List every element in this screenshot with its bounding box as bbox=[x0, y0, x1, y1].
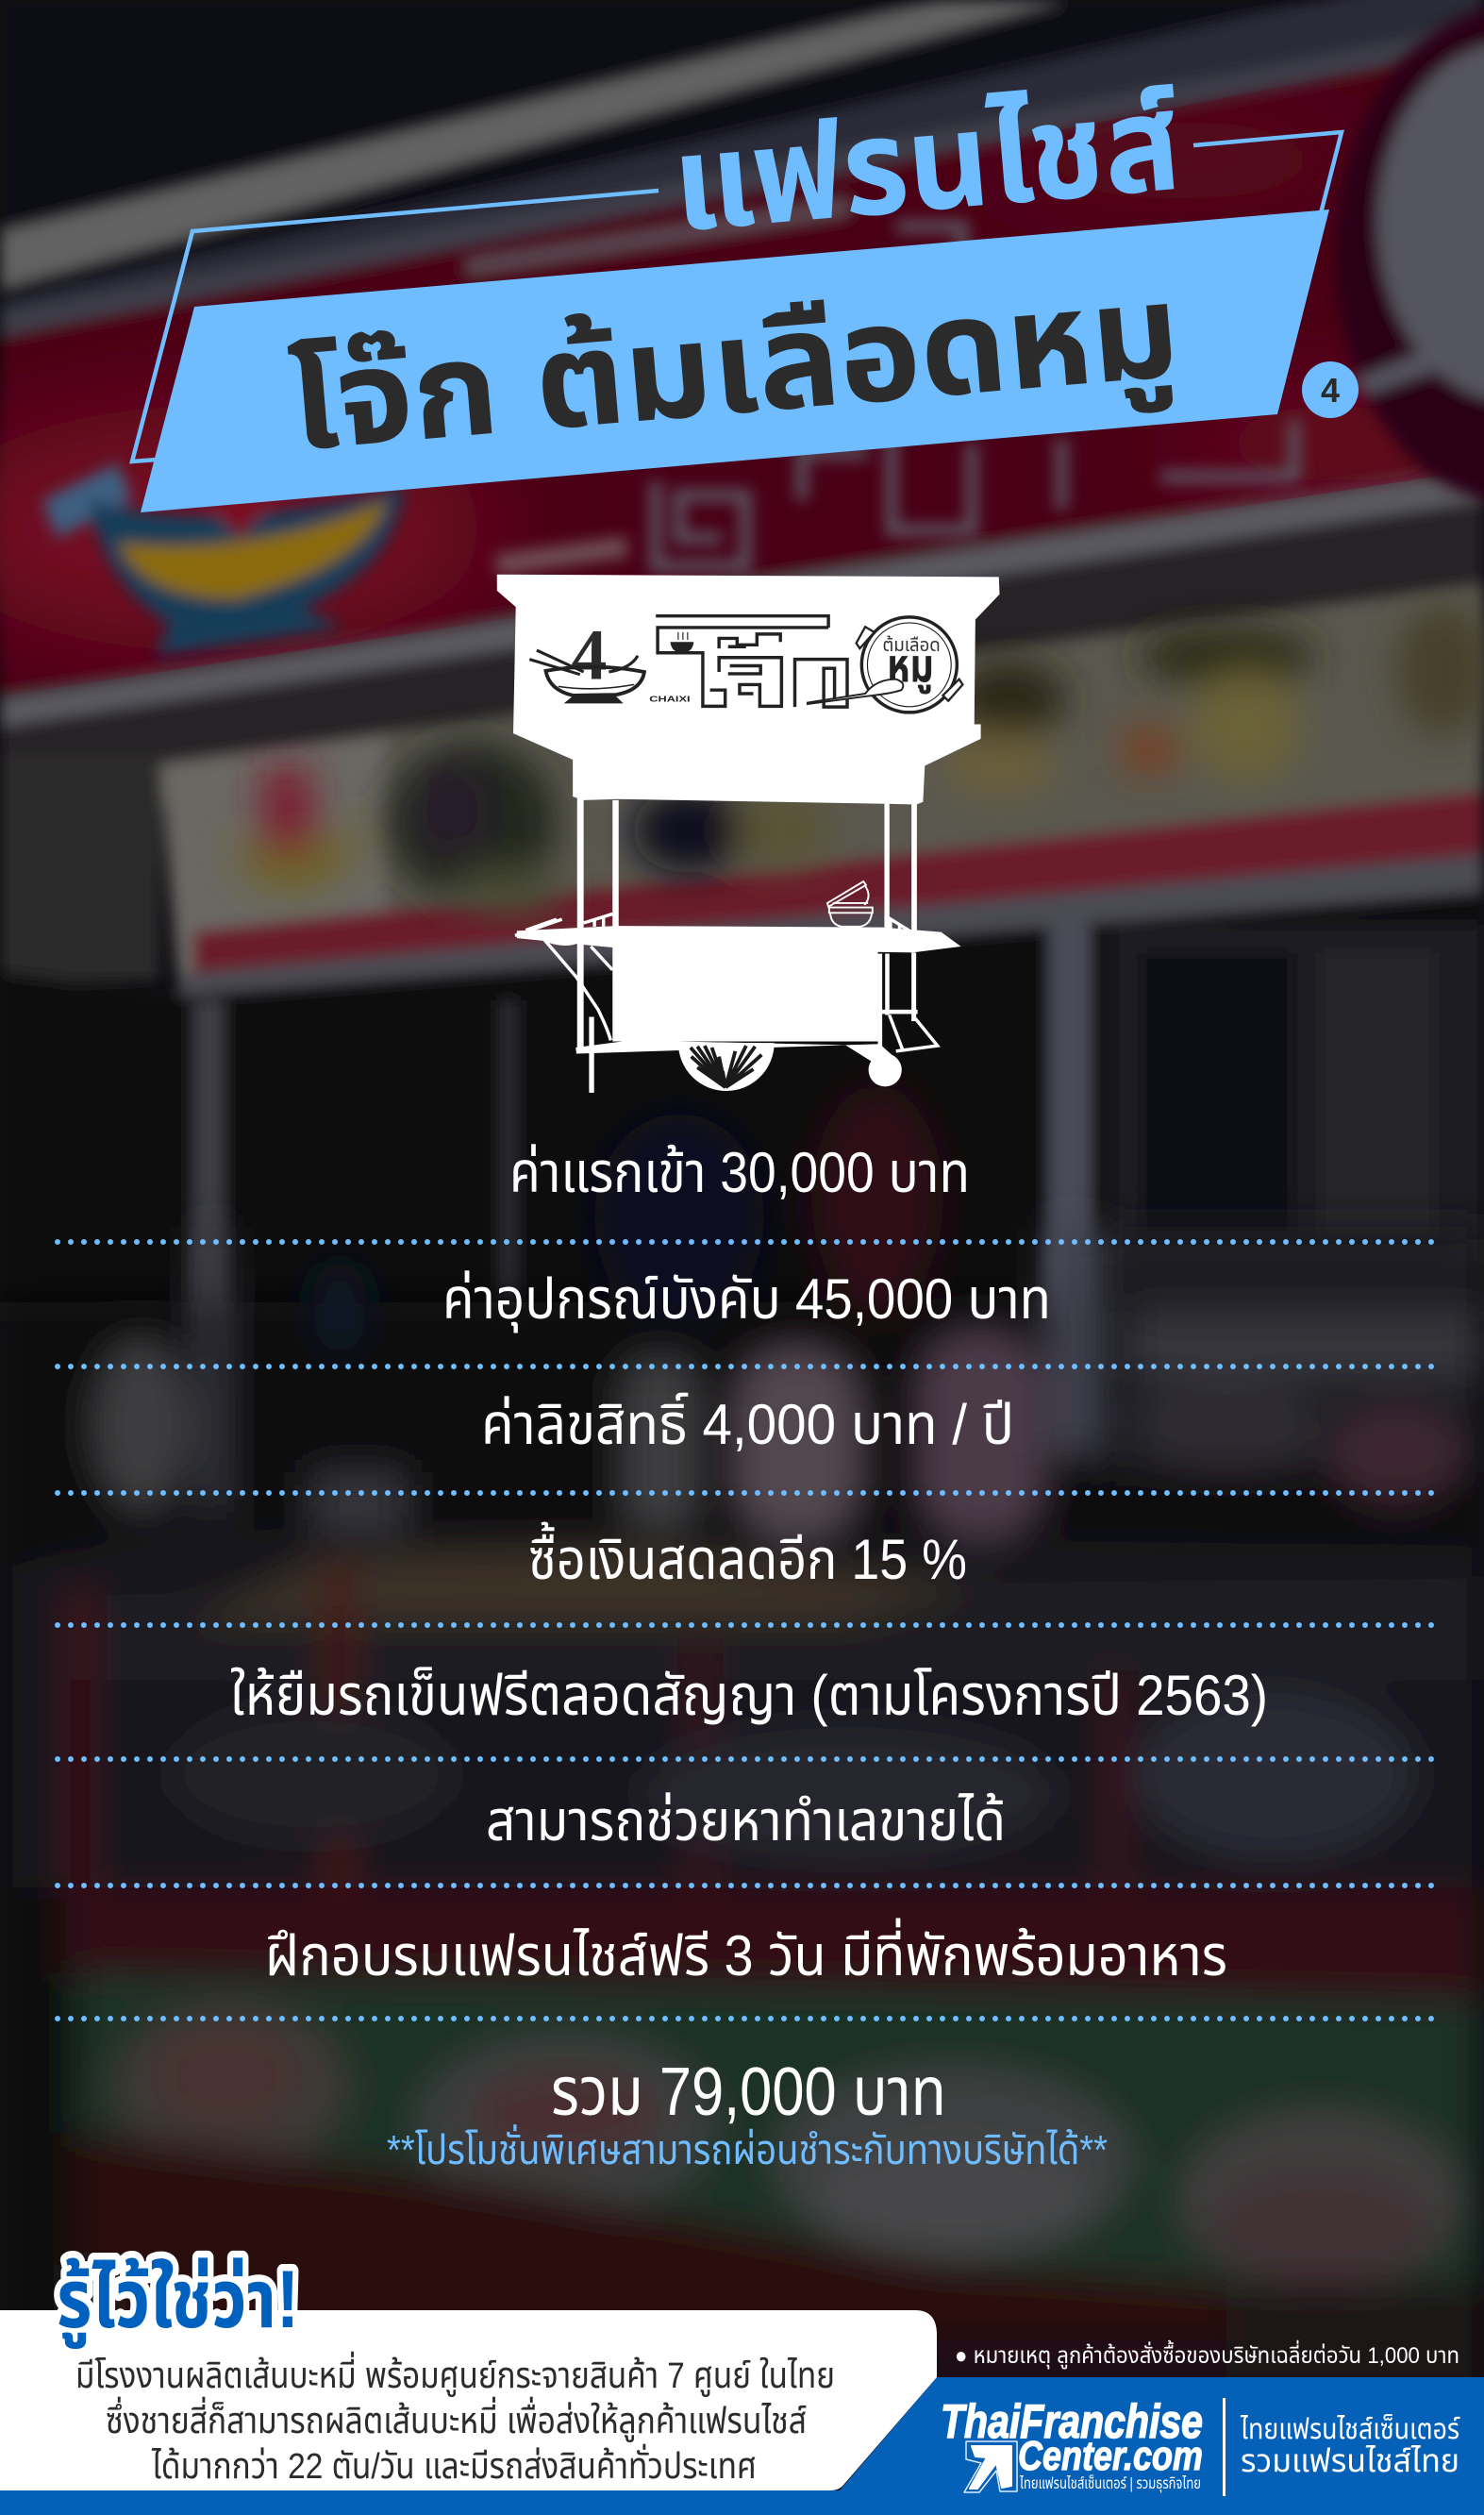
info row: equipment: ค่าอุปกรณ์บังคับ 45,000 บาท bbox=[442, 1267, 1051, 1333]
logo: ThaiFranchise Center: ไทยแฟรนไชส์เซ็นเตอร์ | รวมธุรกิจไทย bbox=[1019, 2474, 1201, 2493]
food panel details bbox=[226, 604, 1484, 915]
footer blue band bbox=[0, 2377, 1484, 2515]
dotted divider 6 bbox=[58, 1883, 1432, 1888]
promotion note: **โปรโมชั่นพิเศษสามารถผ่อนชำระกับทางบริษัทได้** bbox=[387, 2124, 1108, 2173]
cart logo: pot with ต้มเลือดหมู bbox=[808, 617, 962, 713]
badge: number 4 bbox=[1302, 361, 1359, 418]
cart silhouette bbox=[497, 575, 1000, 1093]
title frame outline bbox=[132, 132, 1342, 461]
total price: รวม 79,000 บาท bbox=[551, 2054, 946, 2130]
info row: cash discount: ซื้อเงินสดลดอีก 15 % bbox=[528, 1521, 967, 1591]
logo: ThaiFranchise Center bbox=[941, 2395, 1203, 2493]
panel body text bbox=[75, 2351, 835, 2487]
cart logo: pot with ต้มเลือดหมู: หมู bbox=[887, 639, 934, 694]
lattice marks on sign bbox=[656, 226, 1294, 566]
info row: location help: สามารถช่วยหาทำเลขายได้ bbox=[486, 1789, 1006, 1853]
info row: entrance fee: ค่าแรกเข้า 30,000 บาท bbox=[509, 1141, 970, 1204]
logo: ThaiFranchise Center: Center.com bbox=[1018, 2433, 1203, 2479]
bowl logo on sign bbox=[42, 5, 1484, 656]
title banner: โจ๊ก ต้มเลือดหมู bbox=[141, 210, 1329, 512]
brighter red glow on the signboard bbox=[0, 113, 1484, 651]
did-you-know panel bbox=[0, 2255, 937, 2490]
title: แฟรนไชส์: แฟรนไชส์ bbox=[667, 68, 1186, 260]
cart logo: small steaming bowl bbox=[670, 632, 693, 652]
cart logo: bowl with number 4: 4 bbox=[571, 615, 608, 696]
panel body text: มีโรงงานผลิตเส้นบะหมี่ พร้อมศูนย์กระจายสินค้า 7 ศูนย์ ในไทย bbox=[75, 2351, 835, 2397]
panel body text: ซึ่งชายสี่ก็สามารถผลิตเส้นบะหมี่ เพื่อส่งให้ลูกค้าแฟรนไชส์ bbox=[106, 2396, 807, 2442]
dotted divider 2 bbox=[58, 1364, 1432, 1369]
dotted divider 1 bbox=[58, 1239, 1432, 1245]
dotted divider 4 bbox=[58, 1622, 1432, 1628]
logo tagline bbox=[1240, 2414, 1460, 2479]
wheel spokes bbox=[691, 1046, 761, 1087]
cart logo: โจ๊ก key pattern bbox=[656, 616, 847, 707]
panel body text: ได้มากกว่า 22 ตัน/วัน และมีรถส่งสินค้าทั่วประเทศ bbox=[151, 2443, 757, 2487]
icon: logo arrow bbox=[964, 2441, 1017, 2492]
info row: royalty: ค่าลิขสิทธิ์ 4,000 บาท / ปี bbox=[481, 1393, 1014, 1456]
icon: food cart with logo bbox=[497, 575, 1000, 1093]
panel heading: รู้ไว้ใช่ว่า! bbox=[57, 2255, 299, 2349]
logo tagline: ไทยแฟรนไชส์เซ็นเตอร์ bbox=[1240, 2414, 1460, 2445]
logo: ThaiFranchise Center: ThaiFranchise bbox=[941, 2395, 1203, 2448]
info row: free cart loan: ให้ยืมรถเข็นฟรีตลอดสัญญา (ตามโครงการปี 2563) bbox=[230, 1664, 1268, 1727]
icon: stacked bowls bbox=[827, 881, 873, 929]
badge: number 4: 4 bbox=[1321, 371, 1340, 410]
cart struts bbox=[515, 914, 938, 1051]
dotted divider 5 bbox=[58, 1756, 1432, 1762]
lower scene bbox=[0, 1302, 1484, 2515]
info row: training: ฝึกอบรมแฟรนไชส์ฟรี 3 วัน มีที่พักพร้อมอาหาร bbox=[265, 1918, 1227, 1987]
cart logo: CHAIXI: CHAIXI bbox=[649, 694, 691, 703]
dotted divider 3 bbox=[58, 1490, 1432, 1496]
title banner: โจ๊ก ต้มเลือดหมู: โจ๊ก ต้มเลือดหมู bbox=[284, 256, 1185, 485]
dotted divider 7 bbox=[58, 2016, 1432, 2021]
logo tagline: รวมแฟรนไชส์ไทย bbox=[1241, 2443, 1459, 2479]
logo divider bbox=[1223, 2398, 1226, 2496]
cart logo: bowl with number 4 bbox=[529, 615, 644, 703]
cart logo: pot with ต้มเลือดหมู: ต้มเลือด bbox=[883, 634, 941, 656]
